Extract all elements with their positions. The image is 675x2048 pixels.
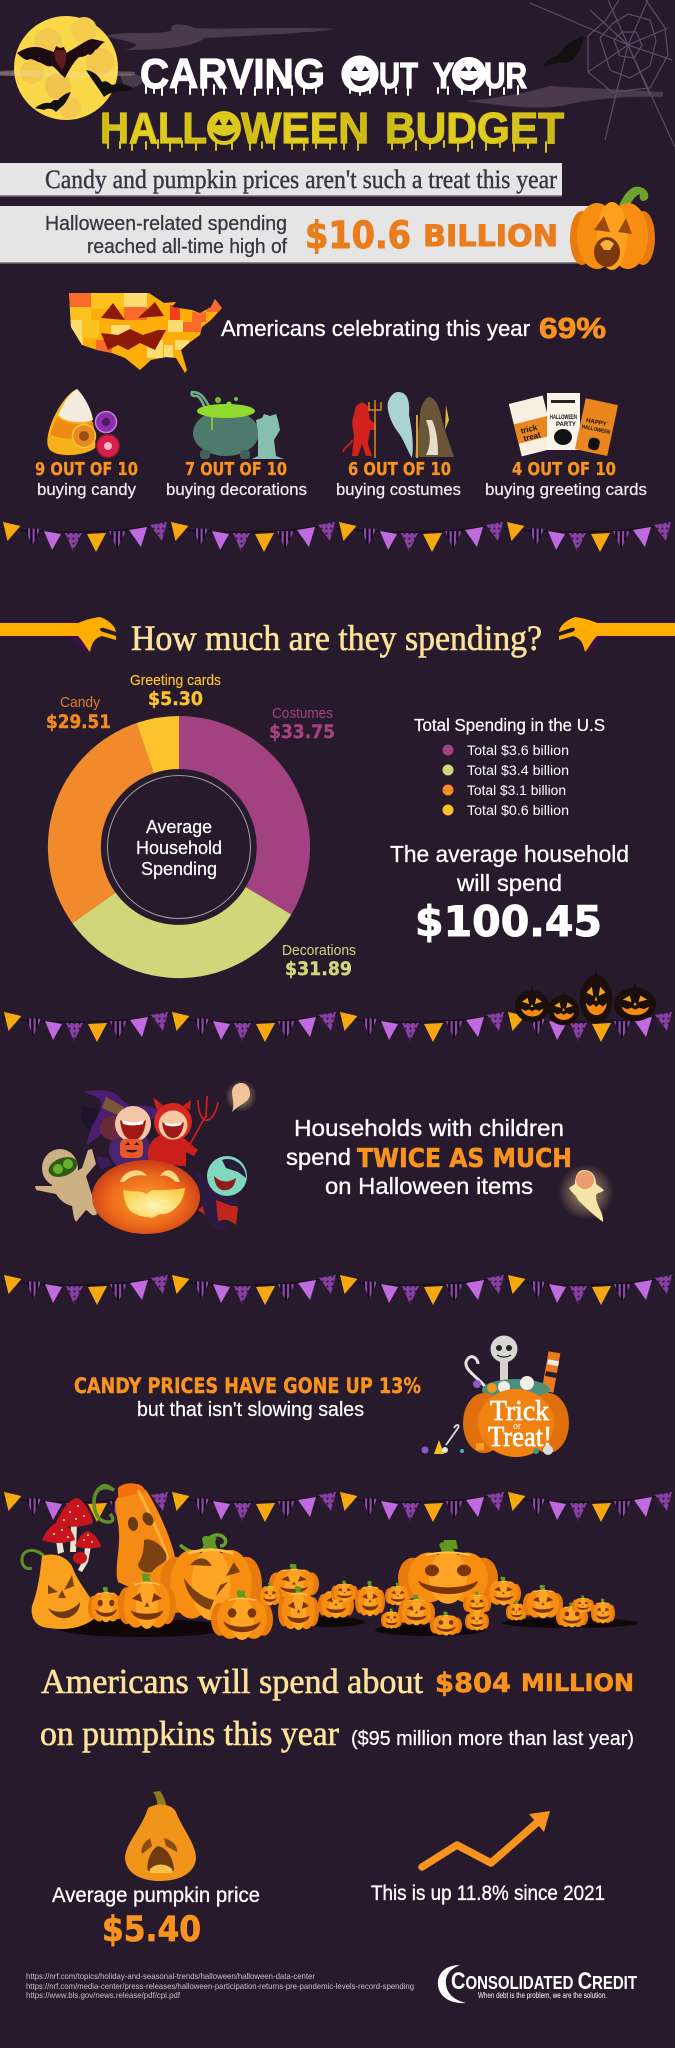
legend: total spending: Total $3.1 billion (467, 782, 566, 798)
icon: pumpkin face O: O (207, 104, 241, 153)
text: Americans celebrating: Americans celebrating this year (221, 316, 530, 341)
title line 1: UT (379, 55, 418, 96)
icon: pumpkin face O (342, 56, 378, 92)
sources: https://www.bls.gov/news.release/pdf/cpi.pdf (26, 1990, 181, 2000)
icon: US map (69, 293, 222, 373)
text: households with children: spend (286, 1144, 351, 1170)
icon: card trick or treat: trick (520, 423, 539, 436)
text: average pumpkin price (52, 1883, 260, 1950)
moon with bats (0, 16, 135, 120)
icon: second bat (86, 70, 133, 97)
label: costumes: Costumes (272, 705, 333, 722)
icon: third bat (35, 92, 71, 112)
bunting row 4 (2, 1492, 674, 1522)
callout: average household will spend: will spend (456, 870, 562, 896)
item: decorations (166, 392, 307, 499)
title line 2: WEEN (241, 104, 369, 153)
slice: greeting cards (137, 716, 179, 773)
bunting row 1 (1, 522, 673, 552)
text: buying greeting cards: buying greeting cards (485, 480, 647, 499)
icon: card halloween party: PARTY (556, 422, 576, 428)
text: 6 out of 10: 6 OUT OF 10 (348, 460, 451, 480)
sources: https://nrf.com/media-center/press-releases/halloween-participation-returns-pre-pandemic-levels-record-spending (26, 1981, 414, 1991)
callout: average household will spend (390, 841, 629, 946)
icon: pumpkin face O (452, 58, 486, 90)
title line 1: O (454, 55, 484, 96)
icon: tall pumpkin (94, 1483, 177, 1590)
icon: sad pumpkin (125, 1791, 196, 1881)
sources (26, 1971, 414, 2000)
arrow: trend up (422, 1811, 550, 1867)
text: 4 out of 10: 4 OUT OF 10 (512, 460, 616, 480)
label: greeting cards (130, 672, 221, 710)
pumpkin bucket (463, 1389, 569, 1457)
text: buying candy: buying candy (37, 480, 136, 499)
spilled candies (422, 1425, 553, 1455)
icon: card happy halloween: HAPPY (585, 418, 607, 428)
text: 9 out of 10: 9 OUT OF 10 (35, 460, 138, 480)
icon: right claw (559, 617, 675, 654)
heading text: How much are they spending? (131, 618, 542, 658)
icon: card trick or treat (509, 395, 556, 456)
legend: total spending: Total $3.6 billion (467, 742, 569, 758)
text: candy prices: CANDY PRICES HAVE GONE UP 13% (74, 1374, 421, 1398)
clouds (0, 24, 663, 108)
label: greeting cards: $5.30 (148, 688, 203, 710)
text: americans will spend: Americans will spend about (41, 1662, 423, 1701)
pumpkin bucket: or (513, 1421, 521, 1431)
label: decorations: Decorations (282, 942, 356, 959)
subtitle bar: Candy and pumpkin prices aren't such a treat this year (45, 165, 557, 194)
icon: devil child (148, 1096, 218, 1166)
text: up since 2021: This is up 11.8% since 2021 (371, 1881, 605, 1905)
text: americans will spend: $804 (435, 1668, 511, 1699)
ground shadows (57, 1617, 638, 1637)
label: decorations (282, 942, 356, 980)
icon: large ghost (558, 1164, 614, 1222)
text: households with children: on Halloween items (325, 1173, 533, 1199)
title line 1: Y (433, 55, 454, 96)
centre ring (108, 776, 250, 918)
icon: card happy halloween (575, 398, 618, 456)
icon: ghost (388, 392, 413, 458)
illustration: pumpkin patch (22, 1483, 638, 1640)
icon: trick or treat bucket (422, 1336, 569, 1457)
icon: left gourd (22, 1550, 97, 1629)
bunting row 3 (2, 1275, 674, 1305)
icon: dracula (196, 1156, 247, 1232)
callout: average household will spend: The average household (390, 841, 629, 867)
spending bar: $10.6 (305, 214, 411, 257)
item: costumes (336, 392, 461, 499)
icon: glowing pumpkin (92, 1160, 200, 1234)
icon: candies (72, 412, 120, 458)
slice: costumes (179, 716, 310, 914)
icon: card halloween party (547, 393, 580, 450)
donut chart: average household spending (48, 716, 310, 978)
title line 1: CARVING (140, 50, 325, 97)
text: americans will spend: ($95 million more than last year) (351, 1728, 634, 1750)
text: households with children (286, 1115, 572, 1199)
spending bar: Halloween-related spending (45, 213, 287, 235)
label: candy: Candy (60, 694, 100, 711)
text: buying decorations: buying decorations (166, 480, 307, 499)
icon: cauldron (191, 392, 259, 459)
icon: card halloween party: HALLOWEEN (550, 415, 577, 421)
heading: how much are they spending (0, 617, 675, 658)
title line 1 (140, 50, 527, 97)
label: costumes: $33.75 (269, 721, 335, 743)
icon: big pumpkin (160, 1535, 262, 1620)
icon: candy cane (466, 1357, 488, 1392)
legend: total spending: Total $0.6 billion (467, 802, 569, 818)
text: average pumpkin price: $5.40 (102, 1910, 201, 1950)
label: costumes (269, 705, 335, 743)
title line 1: O (341, 55, 379, 96)
icon: striped sock (542, 1351, 560, 1393)
logo: consolidated credit: When debt is the problem, we are the solution. (478, 1990, 607, 2000)
text: 7 out of 10: 7 OUT OF 10 (185, 460, 287, 480)
sources: https://nrf.com/topics/holiday-and-seasonal-trends/halloween/halloween-data-center (26, 1971, 315, 1981)
illustration: kids on pumpkin (35, 1090, 247, 1234)
label: candy (46, 694, 111, 733)
text: Americans celebrating: 69% (539, 313, 606, 345)
icon: card happy halloween: HALLOWEEN (581, 424, 611, 436)
label: decorations: $31.89 (285, 958, 352, 980)
text: average pumpkin price: Average pumpkin price (52, 1883, 260, 1907)
text: households with children: TWICE AS MUCH (357, 1144, 572, 1174)
icon: small ghost (225, 1080, 257, 1112)
bunting row 2 (2, 1012, 674, 1042)
centre label: Household (136, 837, 222, 858)
logo: consolidated credit (438, 1965, 637, 2003)
text: candy prices: but that isn't slowing sales (137, 1399, 364, 1421)
candy pile (473, 1376, 550, 1401)
text: Americans celebrating (221, 313, 606, 345)
slice: candy (48, 723, 154, 923)
text: americans will spend: on pumpkins this year (40, 1714, 339, 1753)
icon: witch (83, 1090, 164, 1170)
title line 1: UR (484, 55, 527, 96)
spending bar: BILLION (423, 219, 558, 253)
spending bar (0, 206, 592, 264)
icon: mummy (35, 1149, 97, 1222)
text: candy prices (74, 1374, 421, 1421)
legend: total spending (414, 715, 605, 818)
item: greeting cards (485, 393, 647, 499)
legend: total spending: Total Spending in the U.S (414, 715, 605, 735)
icon: small pumpkins (88, 1564, 615, 1640)
text: households with children: Households with children (294, 1115, 564, 1141)
icon: cat (81, 1104, 99, 1130)
legend: total spending: Total $3.4 billion (467, 762, 569, 778)
centre label: Spending (141, 858, 217, 879)
text: buying costumes: buying costumes (336, 480, 461, 499)
icon: big pumpkin right (398, 1540, 498, 1604)
icon: left claw (0, 617, 116, 654)
text: americans will spend (40, 1662, 634, 1753)
pumpkin bucket: Trick (490, 1396, 549, 1427)
logo: consolidated credit: CONSOLIDATED CREDIT (451, 1968, 637, 1995)
spending bar: reached all-time high of (87, 236, 287, 258)
icon: large bat (17, 39, 105, 78)
centre label: Average (146, 816, 212, 837)
icon: mushrooms (42, 1498, 101, 1572)
title line 2: BUDGET (385, 104, 564, 153)
slice: decorations (72, 887, 291, 978)
title line 2 (100, 104, 564, 153)
icon: candy corn (47, 389, 95, 455)
spider web (530, 0, 675, 147)
pumpkin bucket: Treat! (488, 1422, 552, 1453)
label: candy: $29.51 (46, 711, 111, 733)
item: candy (35, 389, 138, 499)
title line 2: HALL (100, 104, 207, 153)
icon: crescent (438, 1965, 466, 2003)
icon: zombie hand (252, 414, 284, 459)
icon: dark jack-o-lanterns (515, 968, 656, 1025)
icon: skull (490, 1336, 518, 1388)
centre label (136, 816, 222, 879)
icon: screaming pumpkin (570, 187, 655, 270)
icon: devil (343, 400, 381, 458)
icon: right bat (543, 36, 584, 67)
callout: average household will spend: $100.45 (415, 897, 602, 946)
icon: wizard (415, 397, 454, 458)
text: americans will spend: MILLION (521, 1669, 634, 1697)
label: greeting cards: Greeting cards (130, 672, 221, 689)
icon: card trick or treat: treat (523, 430, 542, 443)
